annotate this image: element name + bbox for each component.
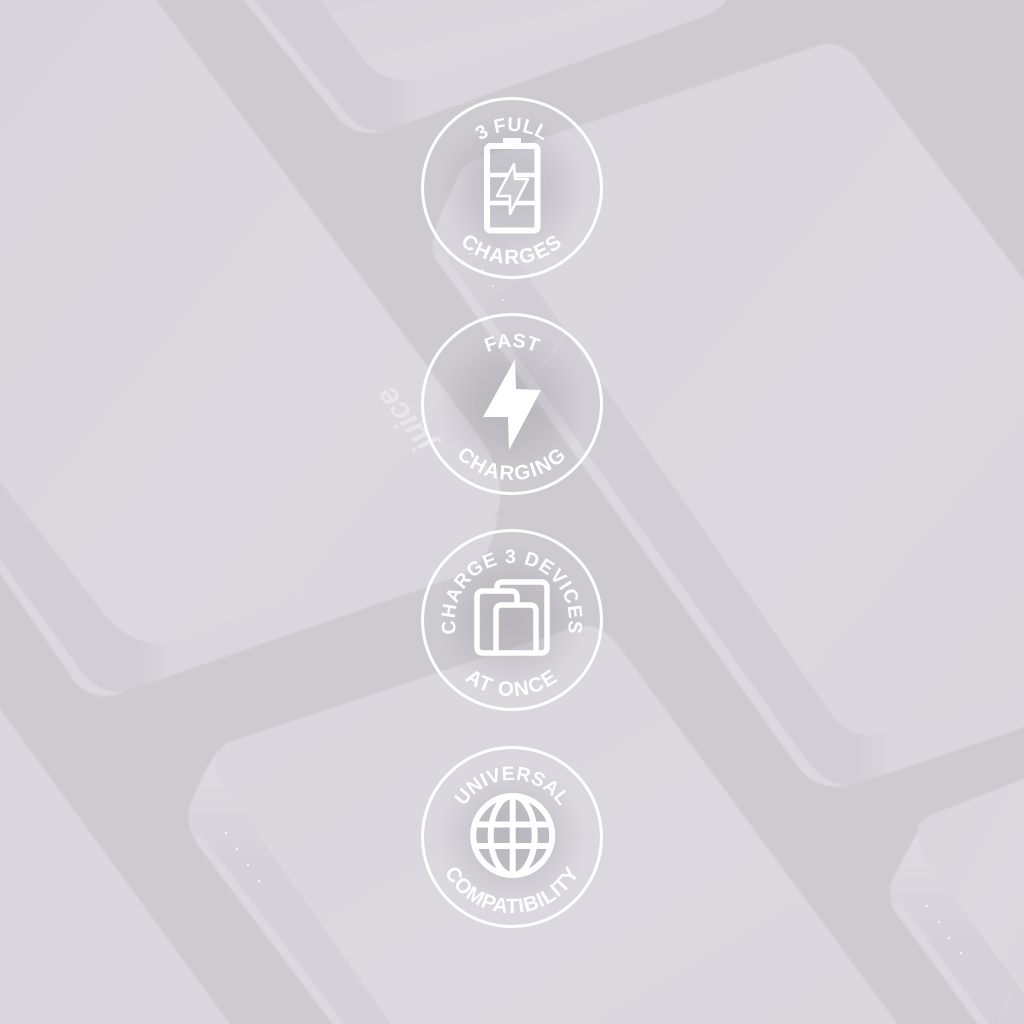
label: charging: CHARGING bbox=[459, 448, 564, 480]
badge: 3 full charges bbox=[421, 97, 603, 279]
badge ring bbox=[422, 530, 602, 710]
badge ring bbox=[422, 98, 602, 278]
badge ring bbox=[422, 314, 602, 494]
label: at once: AT ONCE bbox=[465, 670, 558, 696]
power bank: lower left bbox=[0, 695, 237, 1024]
LED indicator dots: lower right bank bbox=[926, 905, 962, 954]
LED indicator dots: upper right bank bbox=[469, 253, 504, 301]
juice logo: juice bbox=[368, 380, 443, 463]
power bank: top centre bbox=[240, 0, 729, 133]
power bank: bottom centre bbox=[188, 626, 905, 1024]
badge: fast charging bbox=[421, 313, 603, 495]
label: 3 full: 3 FULL bbox=[476, 117, 544, 140]
label: fast: FAST bbox=[484, 334, 541, 352]
label: charges: CHARGES bbox=[463, 235, 560, 264]
icon: battery with bolt bbox=[486, 138, 538, 230]
LED indicator dots: bottom centre bank bbox=[225, 832, 260, 882]
icon: globe bbox=[473, 796, 552, 875]
power bank: lower right bbox=[890, 775, 1024, 1024]
badge: universal compatibility bbox=[421, 746, 603, 928]
power bank: upper left bbox=[0, 0, 500, 696]
label: universal: UNIVERSAL bbox=[454, 766, 566, 806]
label: charge 3 devices: CHARGE 3 DEVICES bbox=[442, 549, 582, 634]
badge ring bbox=[422, 748, 602, 926]
power bank: upper right bbox=[432, 44, 1024, 787]
icon: lightning bolt bbox=[483, 359, 541, 450]
icon: three devices bbox=[477, 582, 547, 653]
label: compatibility: COMPATIBILITY bbox=[447, 866, 576, 913]
badge: charge 3 devices at once bbox=[421, 529, 603, 711]
